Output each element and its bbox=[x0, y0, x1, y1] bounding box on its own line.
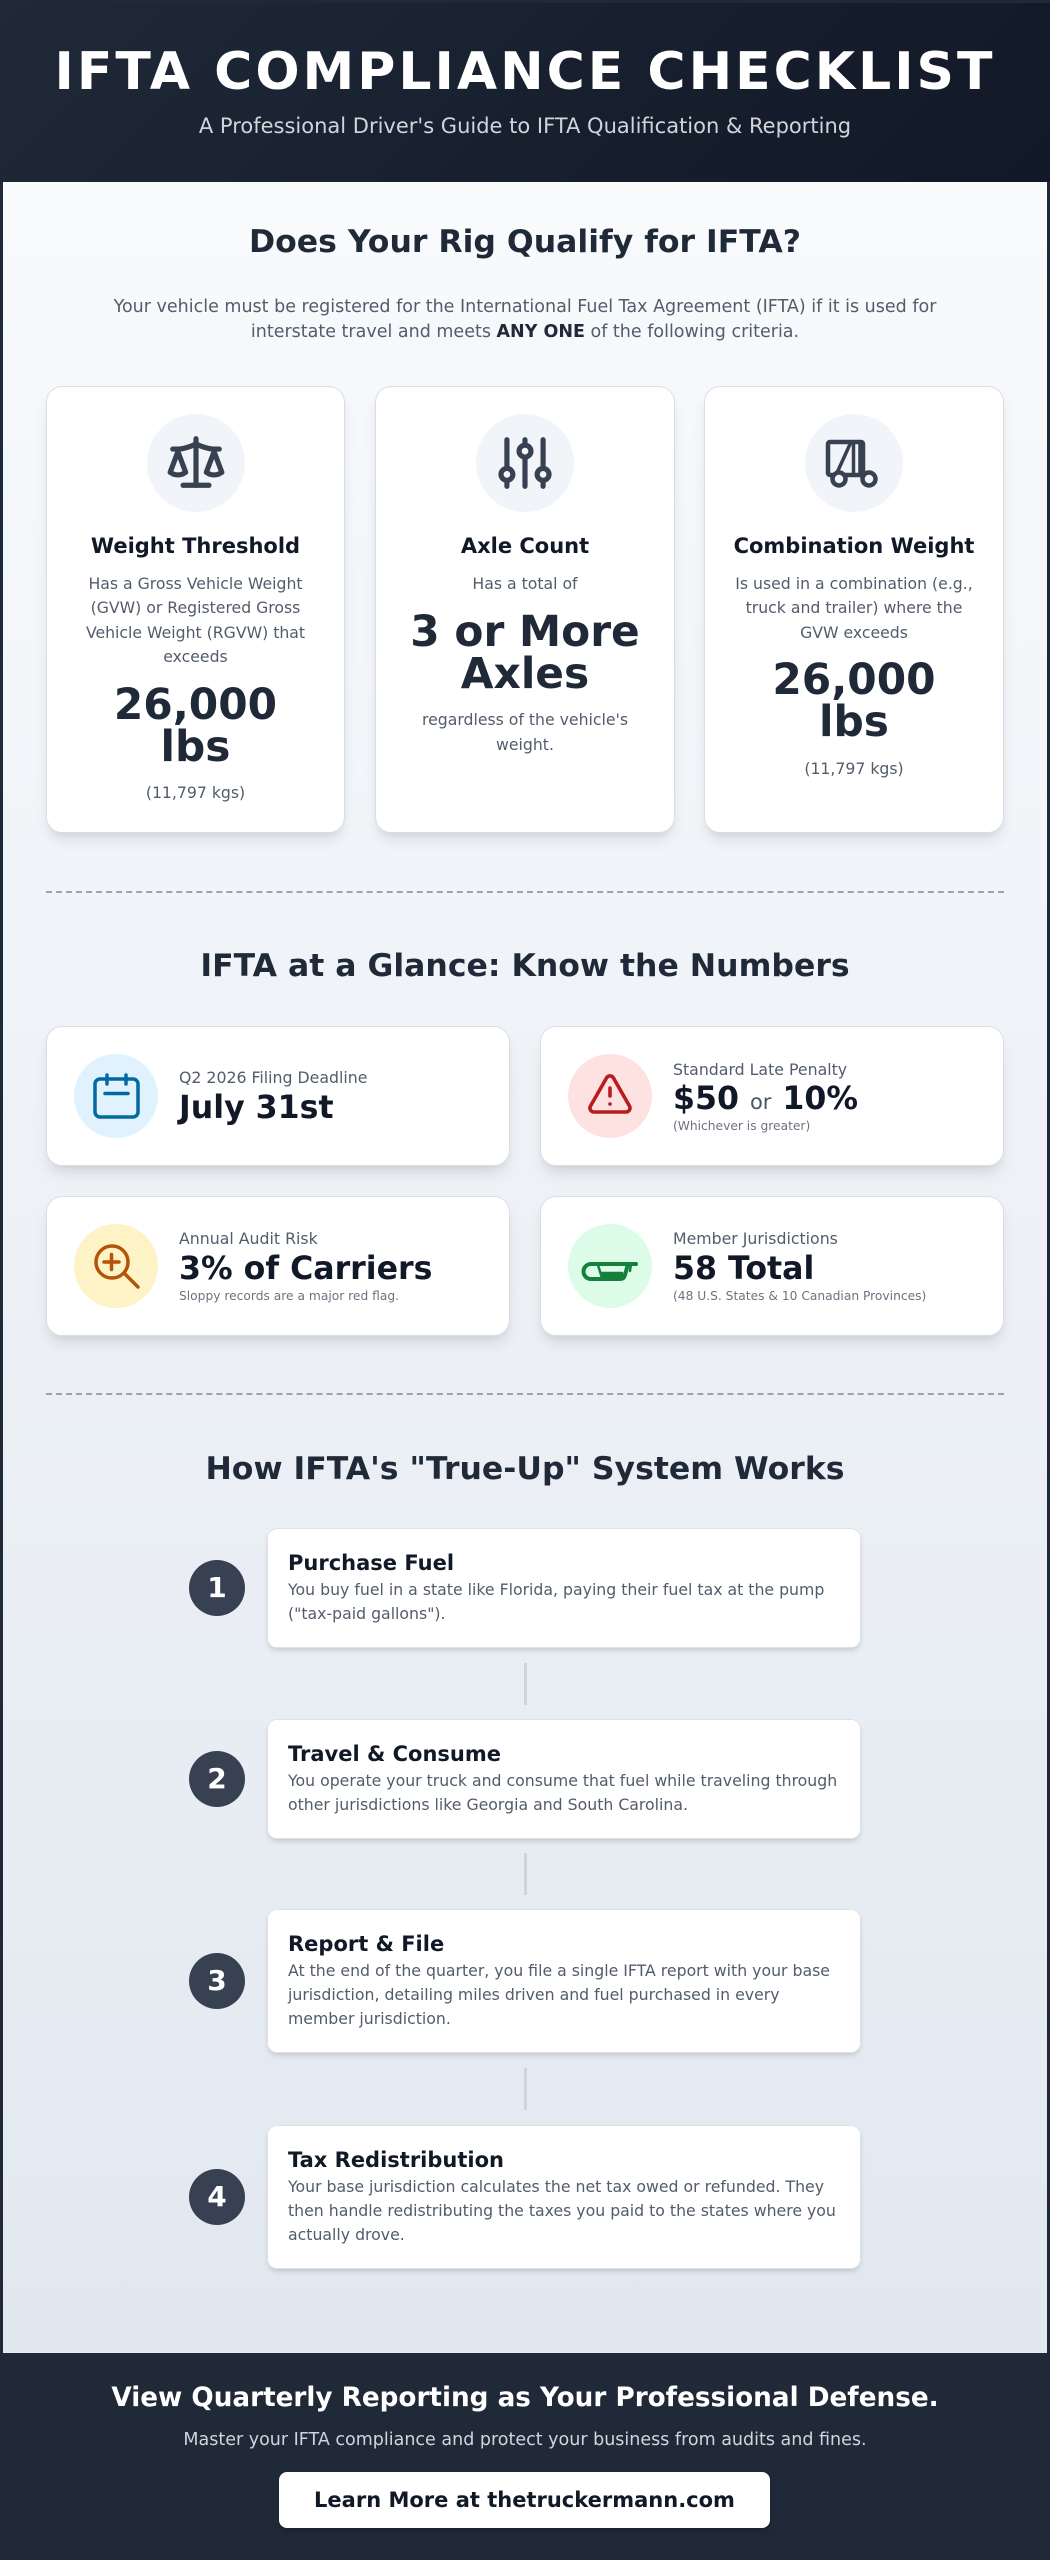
icon: sliders bbox=[476, 414, 574, 512]
connector 2 bbox=[524, 1853, 526, 1895]
card description: truck and trailer) where the bbox=[746, 598, 962, 617]
card description: GVW exceeds bbox=[800, 622, 908, 642]
label: Standard Late Penalty bbox=[673, 1060, 847, 1079]
icon: warning triangle bbox=[568, 1054, 652, 1138]
call to action button bbox=[279, 2472, 770, 2528]
footer text: Master your IFTA compliance and protect your business from audits and fines. bbox=[183, 2430, 867, 2450]
value: July 31st bbox=[179, 1090, 334, 1126]
connector 3 bbox=[524, 2068, 526, 2110]
step title: Purchase Fuel bbox=[288, 1551, 454, 1575]
step text: Your base jurisdiction calculates the net tax owed or refunded. They bbox=[288, 2176, 824, 2196]
step title: Report & File bbox=[288, 1932, 444, 1956]
panel: combination weight bbox=[704, 386, 1004, 833]
icon: calendar bbox=[74, 1054, 158, 1138]
label: Annual Audit Risk bbox=[179, 1229, 318, 1248]
step text: member jurisdiction. bbox=[288, 2009, 451, 2028]
intro text bbox=[114, 296, 936, 342]
card title: Axle Count bbox=[461, 534, 589, 558]
step 2 number bbox=[189, 1751, 245, 1807]
title: IFTA COMPLIANCE CHECKLIST bbox=[54, 42, 995, 102]
big number bbox=[410, 607, 640, 698]
value: 58 Total bbox=[673, 1251, 814, 1287]
big number: lbs bbox=[161, 722, 230, 771]
icon: truck and trailer bbox=[805, 414, 903, 512]
connector 1 bbox=[524, 1663, 526, 1705]
step text: You operate your truck and consume that fuel while traveling through bbox=[288, 1770, 837, 1790]
header banner bbox=[0, 0, 1050, 182]
card description bbox=[86, 574, 305, 666]
panel: weight threshold bbox=[46, 386, 345, 833]
step text: then handle redistributing the taxes you paid to the states where you bbox=[288, 2201, 836, 2220]
card title: Weight Threshold bbox=[91, 534, 300, 558]
card description: Is used in a combination (e.g., bbox=[735, 574, 973, 592]
big number: lbs bbox=[819, 697, 889, 746]
heading: does your rig qualify: Does Your Rig Qualify for IFTA? bbox=[249, 224, 801, 260]
heading: at a glance: IFTA at a Glance: Know the Numbers bbox=[200, 948, 850, 984]
subtitle: A Professional Driver's Guide to IFTA Qualification & Reporting bbox=[199, 114, 851, 138]
step text bbox=[288, 1770, 837, 1814]
card description: Has a total of bbox=[472, 574, 578, 592]
panel: axle count bbox=[375, 386, 675, 833]
big number: 3 or More bbox=[410, 607, 640, 656]
step 4 number bbox=[189, 2169, 245, 2225]
icon: fuel tanker bbox=[568, 1224, 652, 1308]
card note: regardless of the vehicle's bbox=[422, 710, 628, 729]
step 4 number: 4 bbox=[207, 2180, 227, 2213]
step text: other jurisdictions like Georgia and South Carolina. bbox=[288, 1795, 688, 1814]
stat card: late penalty bbox=[540, 1026, 1004, 1166]
step text: actually drove. bbox=[288, 2225, 405, 2244]
heading: true-up system: How IFTA's "True-Up" System Works bbox=[205, 1451, 845, 1487]
step text: At the end of the quarter, you file a single IFTA report with your base bbox=[288, 1960, 830, 1980]
big number: 26,000 bbox=[114, 680, 277, 729]
value: 3% of Carriers bbox=[179, 1251, 432, 1287]
note: (48 U.S. States & 10 Canadian Provinces) bbox=[673, 1289, 926, 1303]
footer bbox=[0, 2353, 1050, 2560]
big number: 26,000 bbox=[772, 655, 936, 704]
step 1 number: 1 bbox=[207, 1571, 227, 1604]
step text bbox=[288, 2176, 836, 2244]
card note bbox=[422, 710, 628, 754]
step text bbox=[288, 1960, 830, 2028]
label: Q2 2026 Filing Deadline bbox=[179, 1068, 367, 1087]
metric conversion: (11,797 kgs) bbox=[146, 783, 245, 802]
step title: Tax Redistribution bbox=[288, 2148, 504, 2172]
step text bbox=[288, 1580, 824, 1623]
card description: exceeds bbox=[163, 647, 228, 666]
stat card: audit risk bbox=[46, 1196, 510, 1336]
card description: Vehicle Weight (RGVW) that bbox=[86, 622, 305, 642]
step 1 card bbox=[267, 1528, 861, 1648]
intro text: Your vehicle must be registered for the International Fuel Tax Agreement (IFTA) if it is used for bbox=[114, 296, 936, 316]
step text: You buy fuel in a state like Florida, paying their fuel tax at the pump bbox=[288, 1580, 824, 1598]
card description: (GVW) or Registered Gross bbox=[91, 598, 300, 617]
note: Sloppy records are a major red flag. bbox=[179, 1289, 399, 1303]
footer heading: View Quarterly Reporting as Your Professional Defense. bbox=[111, 2383, 939, 2413]
stat card: filing deadline bbox=[46, 1026, 510, 1166]
intro text: interstate travel and meets ANY ONE of the following criteria. bbox=[251, 322, 799, 342]
card description bbox=[735, 574, 973, 642]
stat card: jurisdictions bbox=[540, 1196, 1004, 1336]
call to action button: Learn More at thetruckermann.com bbox=[314, 2488, 735, 2512]
icon: magnifying glass bbox=[74, 1224, 158, 1308]
step 1 number bbox=[189, 1560, 245, 1616]
big number bbox=[114, 680, 277, 771]
step 3 card bbox=[267, 1909, 861, 2053]
big number: Axles bbox=[461, 649, 589, 698]
big number bbox=[772, 655, 936, 746]
step text: jurisdiction, detailing miles driven and fuel purchased in every bbox=[288, 1985, 780, 2004]
icon: scales bbox=[147, 414, 245, 512]
label: Member Jurisdictions bbox=[673, 1229, 838, 1248]
note: (Whichever is greater) bbox=[673, 1119, 810, 1133]
value: $50 or 10% bbox=[673, 1081, 858, 1117]
step 3 number: 3 bbox=[207, 1964, 227, 1997]
step title: Travel & Consume bbox=[288, 1742, 501, 1766]
step text: ("tax-paid gallons"). bbox=[288, 1604, 446, 1623]
step 3 number bbox=[189, 1953, 245, 2009]
metric conversion: (11,797 kgs) bbox=[804, 759, 904, 778]
step 2 card bbox=[267, 1719, 861, 1839]
step 2 number: 2 bbox=[207, 1762, 227, 1795]
card note: weight. bbox=[496, 734, 554, 754]
step 4 card bbox=[267, 2125, 861, 2269]
card title: Combination Weight bbox=[734, 534, 974, 558]
card description: Has a Gross Vehicle Weight bbox=[88, 574, 303, 592]
